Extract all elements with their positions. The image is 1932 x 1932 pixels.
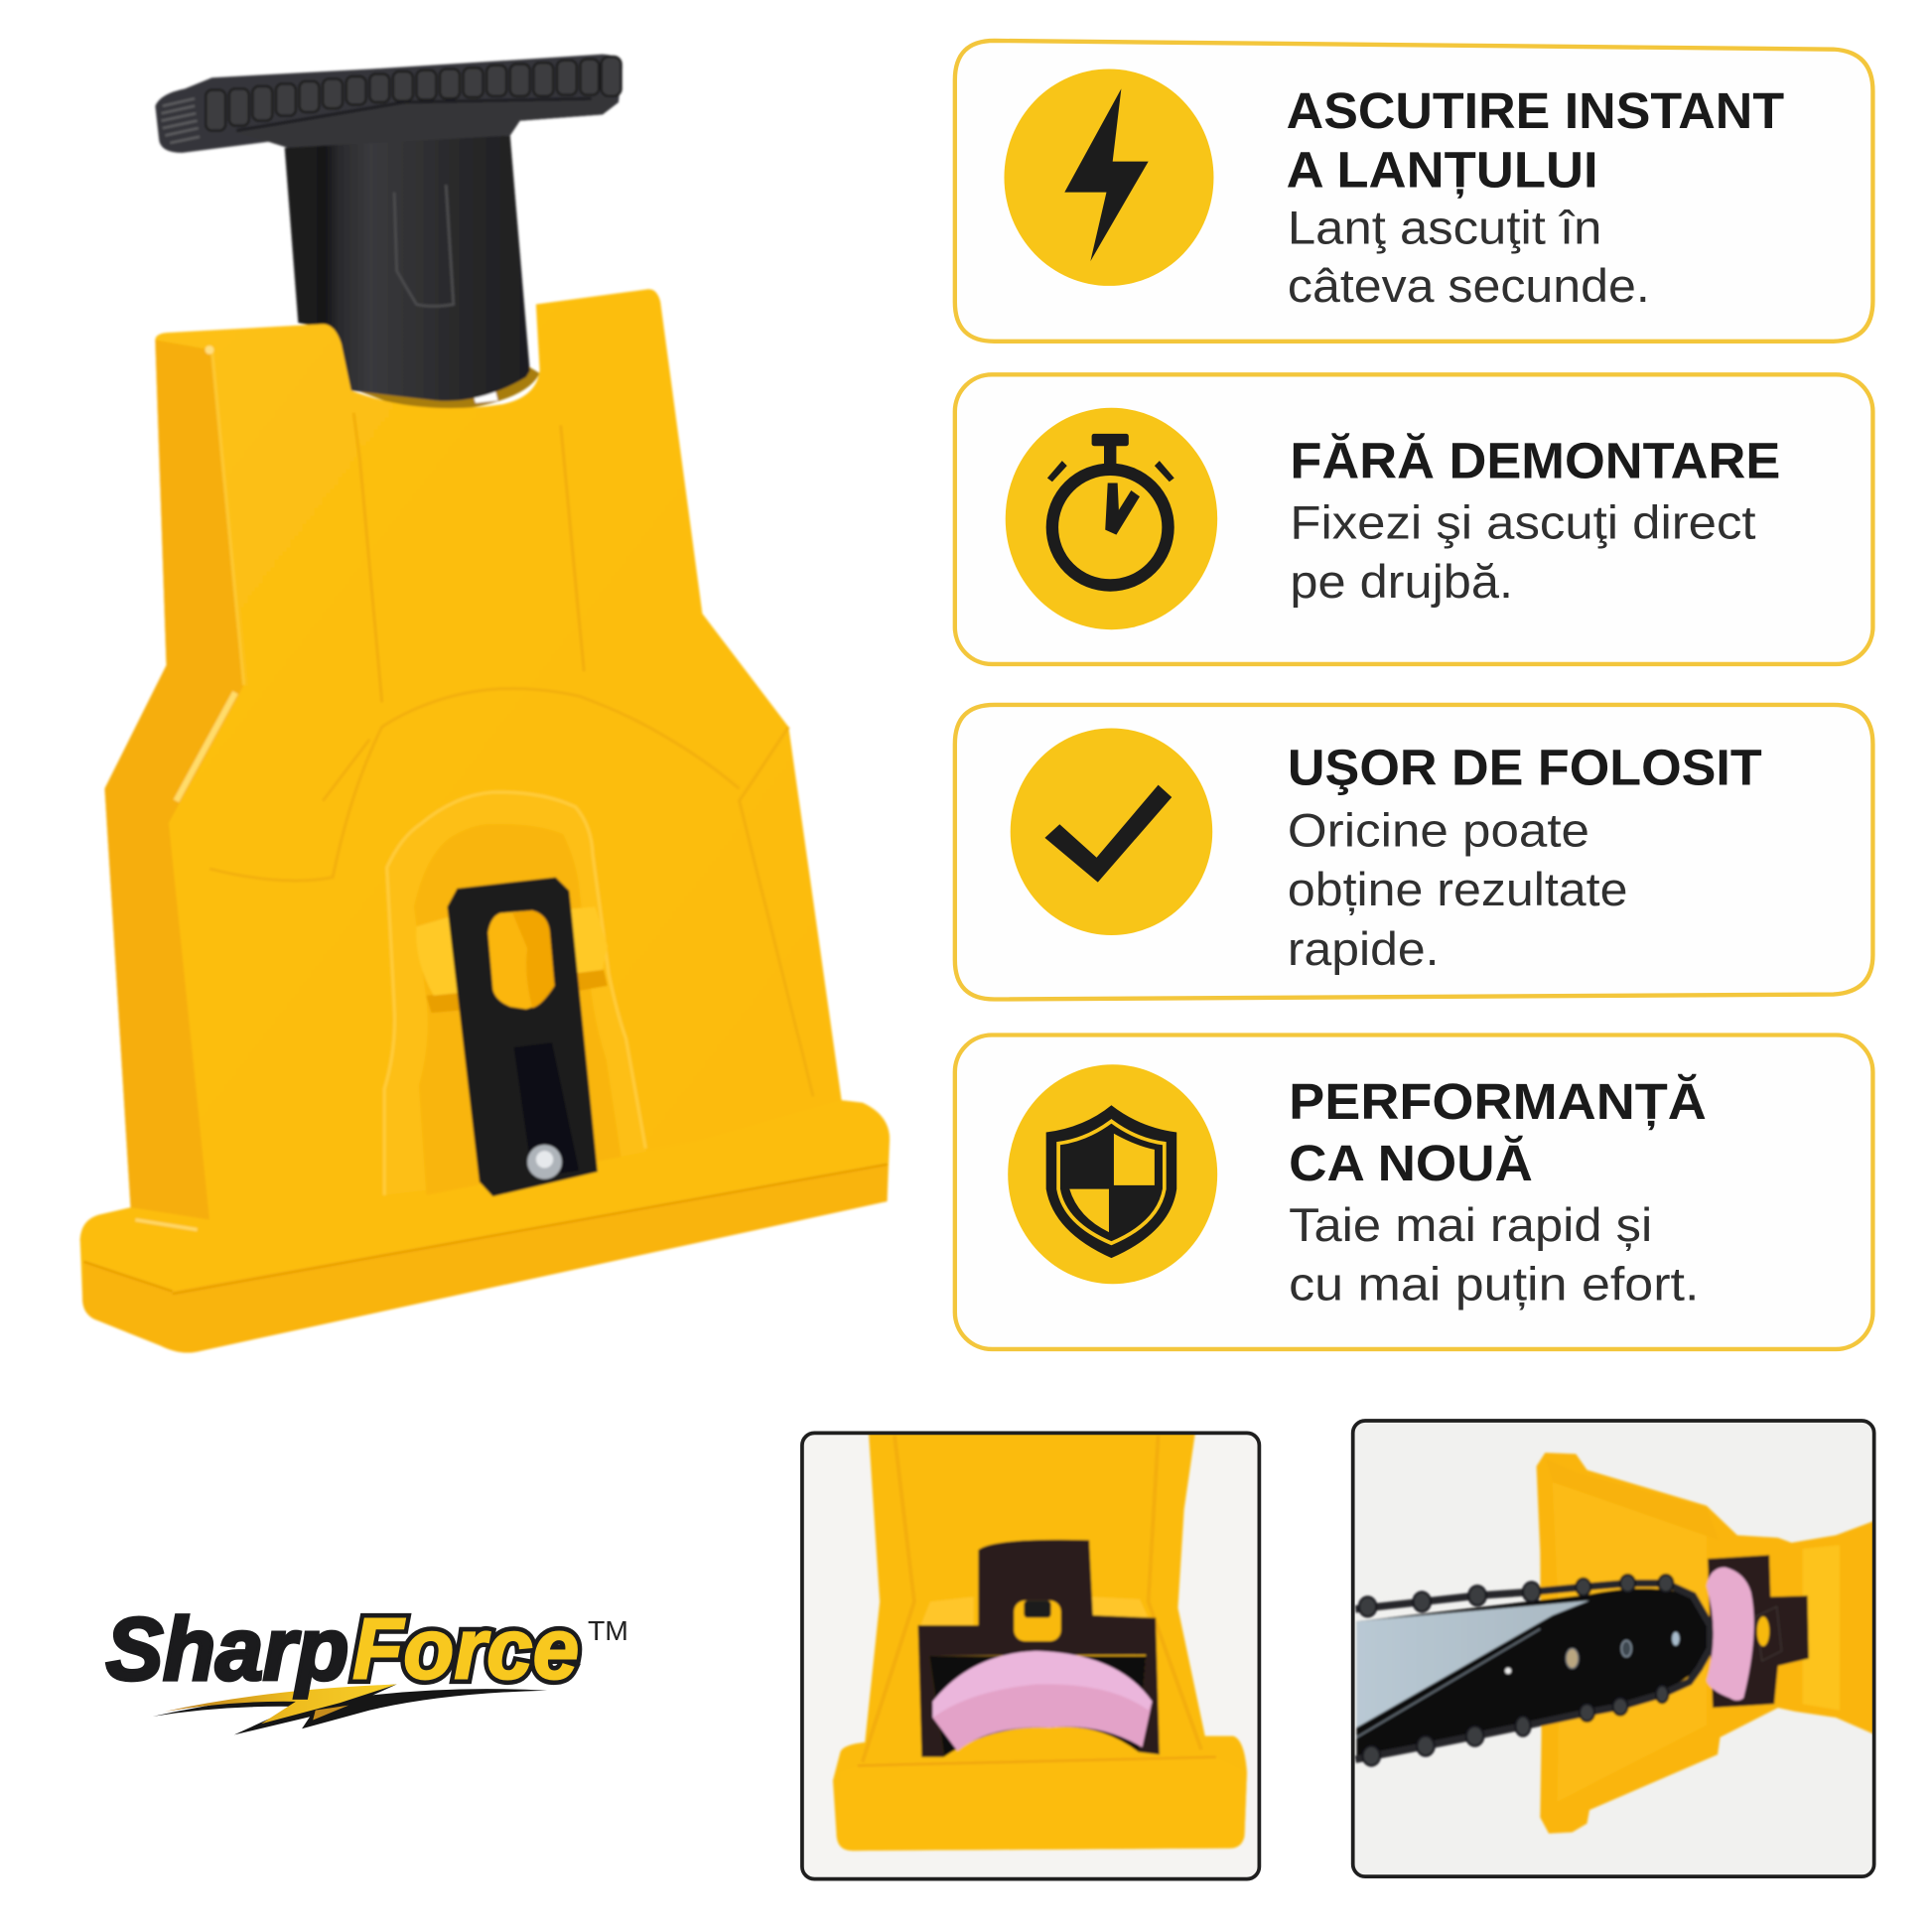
left side facet [104,341,244,1220]
guide bar [1356,1588,1714,1759]
icon: check mark [1011,728,1212,935]
saw chain [1355,1584,1711,1759]
knob wheel [155,55,622,153]
yellow sharpener [1537,1452,1875,1834]
panel: no disassembly [955,374,1872,664]
icon: shield [1008,1064,1217,1284]
black clip [448,878,598,1196]
shoulder arc [209,689,813,1097]
description: Lanţ ascuţit în [1288,202,1601,254]
main product: yellow chain sharpener [80,55,890,1352]
pink stone [1707,1568,1754,1701]
wordmark yellow part: Force [352,1600,579,1697]
wordmark yellow part: Force [352,1600,579,1697]
black holder [918,1540,1160,1757]
panel: instant sharpening [955,41,1872,342]
heading: UŞOR DE FOLOSIT [1288,740,1762,796]
description: pe drujbă. [1290,555,1513,608]
arch recess [384,792,653,1195]
heading: A LANȚULUI [1287,142,1598,200]
description: Fixezi şi ascuţi direct [1290,495,1756,548]
description: cu mai puțin efort. [1289,1257,1699,1310]
icon: stopwatch [1006,408,1217,629]
heading: FĂRĂ DEMONTARE [1290,433,1780,489]
pink stone [932,1651,1152,1751]
photo: sharpener on chainsaw bar [1353,1421,1875,1876]
description: Taie mai rapid și [1289,1198,1652,1251]
trademark: TM [588,1615,628,1646]
icon: lightning bolt [1004,69,1213,286]
screw [527,1145,562,1179]
yellow pivot pin [416,906,608,1013]
panel: easy to use [955,705,1872,1000]
black mount [1708,1555,1809,1708]
photo: grinding stone close-up [802,1433,1259,1879]
holder window [1014,1600,1061,1641]
yellow body [833,1433,1247,1851]
panel: like-new performance [955,1035,1872,1349]
wordmark black part: Sharp [106,1599,348,1699]
knob stem [285,136,530,401]
heading: PERFORMANȚĂ [1289,1073,1707,1131]
heading: CA NOUĂ [1289,1135,1533,1191]
heading: ASCUTIRE INSTANT [1287,82,1784,139]
dark shade in notch [351,367,540,414]
logo: SharpForce [106,1599,628,1734]
sharpener body [80,289,890,1352]
grey bar face [1356,1600,1589,1727]
mount window [1756,1606,1782,1661]
description: obține rezultate [1288,863,1627,915]
central raised panel [353,413,584,702]
description: Oricine poate [1288,804,1589,857]
description: rapide. [1288,922,1440,975]
base plate [80,1100,890,1294]
recess band [919,1595,1150,1626]
logo lightning swoosh [153,1685,547,1734]
bar holes [1505,1632,1680,1674]
description: câteva secunde. [1288,259,1650,312]
holder inner dark [929,1656,1146,1757]
